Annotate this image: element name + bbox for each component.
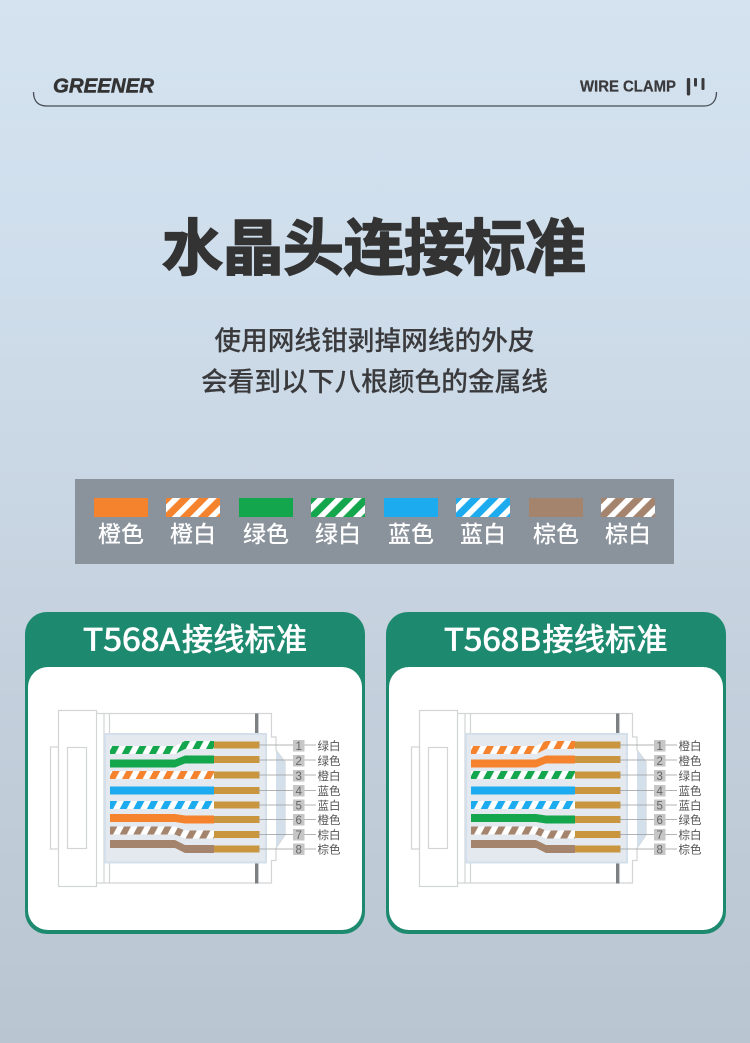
pin colour labels: 蓝白 [678, 798, 702, 812]
pin colour labels: 棕色 [678, 842, 702, 856]
panel: T568A [25, 612, 365, 934]
pin numbers: 1 [295, 741, 302, 753]
pin colour labels: 绿白 [318, 739, 340, 753]
pin numbers: 8 [295, 844, 302, 856]
pin numbers: 5 [295, 800, 302, 812]
swatch: 橙色 [94, 498, 148, 547]
swatch: 棕色: 棕色 [533, 521, 579, 547]
diagram: T568A connector [50, 710, 341, 886]
pin colour labels: 棕白 [678, 828, 702, 842]
pin colour labels: 橙白 [318, 769, 340, 783]
title: 水晶头连接标准 [162, 214, 586, 282]
pin numbers: 7 [295, 830, 302, 842]
swatch: 橙白 [166, 498, 220, 547]
diagram: T568B connector [412, 710, 702, 886]
pin colour labels: 蓝色 [678, 784, 702, 798]
pin numbers [295, 741, 302, 856]
pin numbers: 5 [656, 800, 663, 812]
pin numbers: 1 [656, 741, 663, 753]
swatch: 橙色: 橙色 [98, 521, 144, 547]
pin numbers: 4 [295, 786, 302, 798]
pin colour labels: 绿色 [318, 754, 341, 768]
leader lines [258, 745, 316, 849]
pin colour labels: 棕色 [318, 842, 341, 856]
pin numbers: 7 [656, 830, 663, 842]
pin colour labels: 棕白 [318, 828, 340, 842]
pin numbers: 2 [656, 756, 663, 768]
pin numbers [656, 741, 663, 856]
pin number boxes [293, 740, 304, 855]
heading: T568A: 接线标准 [182, 614, 307, 660]
header bar [34, 75, 716, 106]
pin colour labels: 绿色 [678, 813, 702, 827]
swatch: 绿白 [311, 498, 365, 547]
pin colour labels: 橙色 [678, 754, 702, 768]
swatch: 蓝色 [384, 498, 438, 547]
pin colour labels [678, 739, 702, 856]
heading: T568A: T568A [83, 614, 180, 660]
heading: T568A [83, 614, 307, 660]
wires [471, 741, 575, 754]
header rule [34, 92, 716, 106]
pin colour labels: 蓝白 [318, 798, 340, 812]
pin colour labels: 绿白 [678, 769, 702, 783]
pin colour labels [318, 739, 341, 856]
swatch: 蓝白 [456, 498, 510, 547]
heading: T568B: T568B [444, 614, 541, 660]
subtitle text: 会看到以下八根颜色的金属线 [201, 367, 548, 397]
pin numbers: 2 [295, 756, 302, 768]
swatch: 橙白: 橙白 [170, 521, 216, 547]
panel: T568B [386, 612, 726, 934]
pin numbers: 4 [656, 786, 663, 798]
subtitle text [201, 326, 548, 397]
connector outline [412, 710, 646, 886]
swatch: 绿色: 绿色 [243, 521, 289, 547]
swatch: 蓝白: 蓝白 [460, 521, 506, 547]
swatch: 棕白: 棕白 [605, 521, 651, 547]
swatch: 棕白 [601, 498, 655, 547]
swatch: 棕色 [529, 498, 583, 547]
connector outline [50, 710, 285, 886]
logo: GREENER: GREENER [53, 75, 155, 97]
swatch: 绿白: 绿白 [315, 521, 361, 547]
subtitle text: 使用网线钳剥掉网线的外皮 [214, 326, 535, 356]
gold contacts [214, 742, 260, 852]
wires [110, 741, 214, 754]
swatch: 蓝色: 蓝色 [388, 521, 434, 547]
gold contacts [575, 742, 620, 852]
leader lines [619, 745, 677, 849]
heading: T568B: 接线标准 [542, 614, 668, 660]
pin numbers: 6 [295, 815, 302, 827]
pin numbers: 8 [656, 844, 663, 856]
heading: T568B [444, 614, 668, 660]
icon: clamp mark [687, 78, 704, 96]
swatch: 绿色 [239, 498, 293, 547]
pin colour labels: 橙色 [318, 813, 341, 827]
pin numbers: 3 [656, 771, 663, 783]
panel: colour legend [75, 479, 674, 564]
pin colour labels: 橙白 [678, 739, 702, 753]
pin numbers: 3 [295, 771, 302, 783]
pin number boxes [654, 740, 666, 855]
label: WIRE CLAMP: WIRE CLAMP [580, 79, 676, 96]
pin numbers: 6 [656, 815, 663, 827]
pin colour labels: 蓝色 [318, 784, 341, 798]
